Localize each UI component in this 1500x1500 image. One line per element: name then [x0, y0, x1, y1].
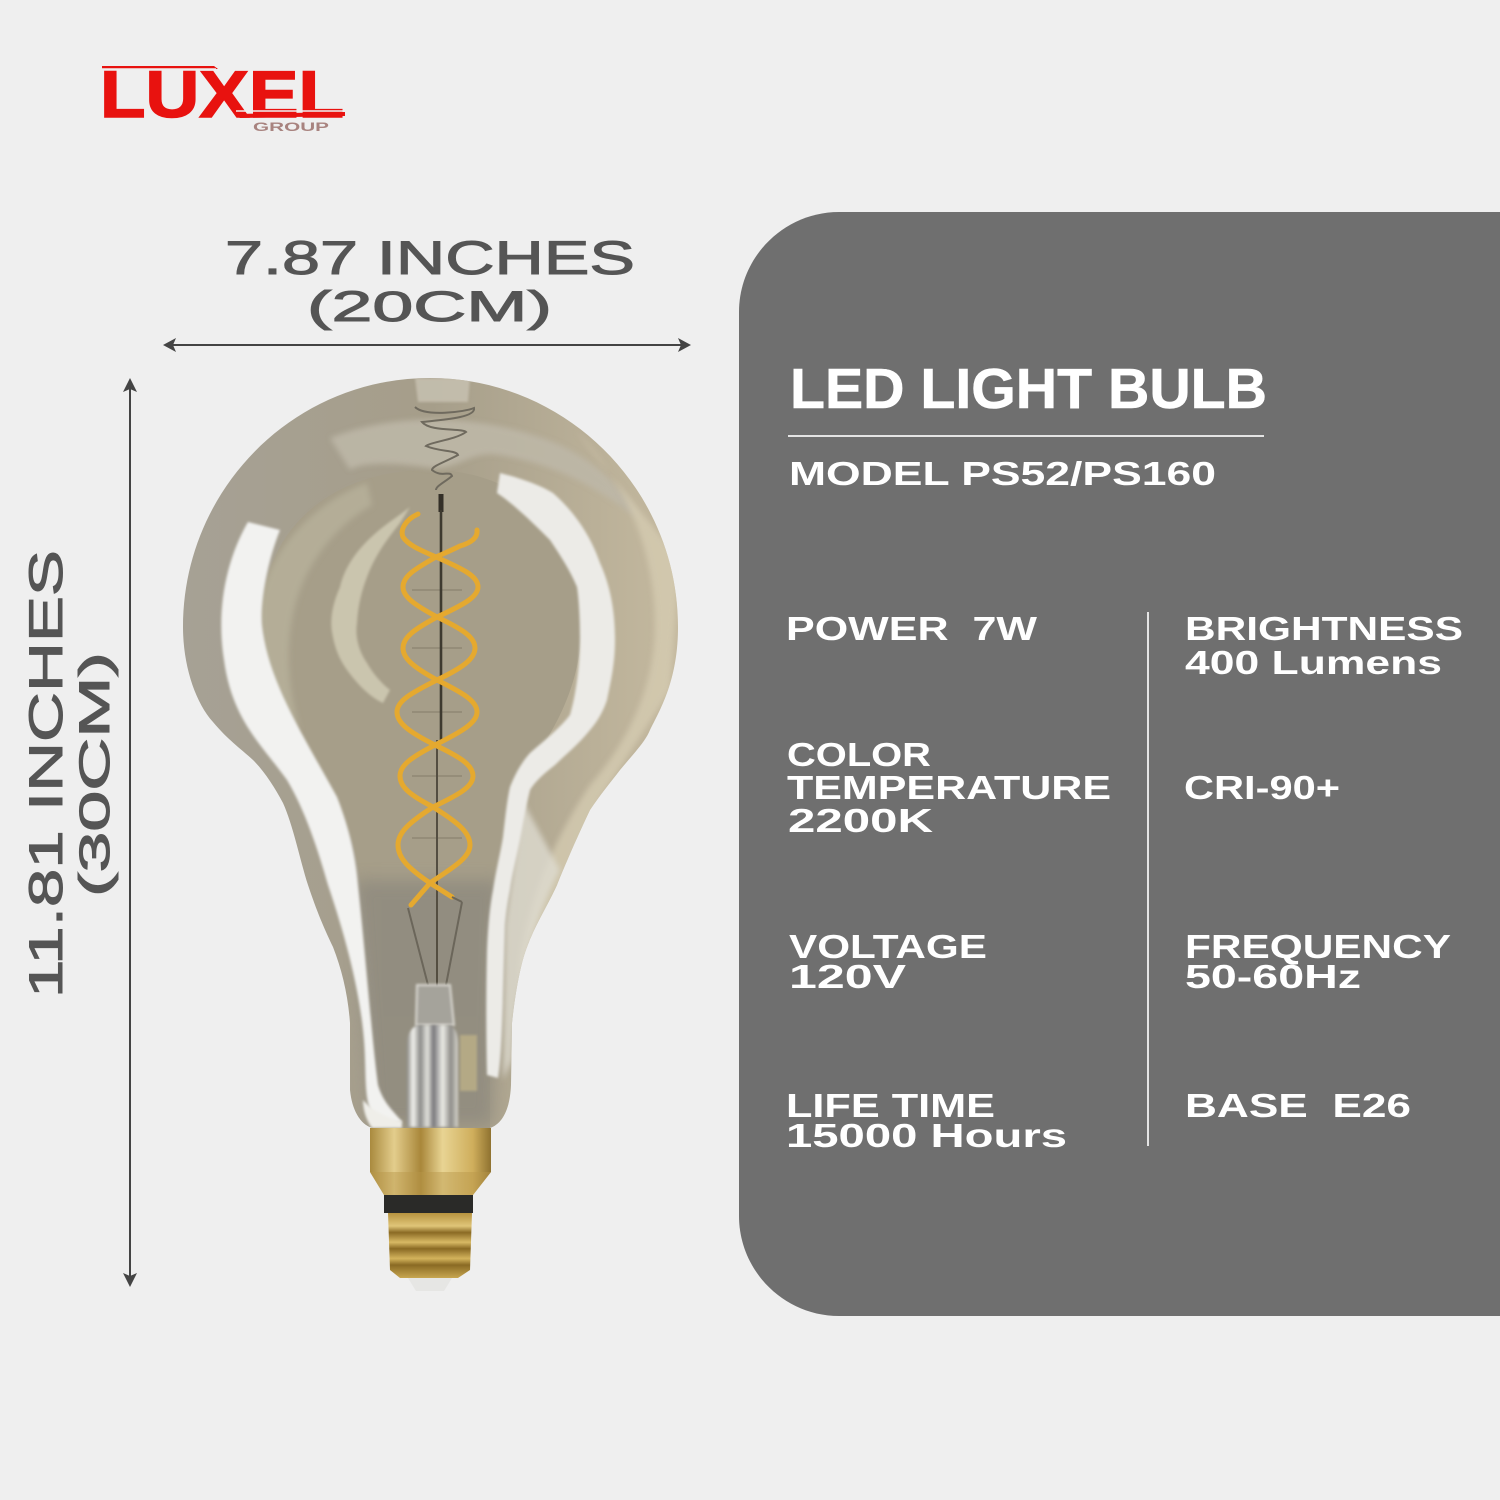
spec: brightness: BRIGHTNESS — [1185, 610, 1463, 647]
filament helix — [397, 514, 478, 905]
spec: life time: 15000 Hours — [786, 1117, 1067, 1154]
screw base — [388, 1213, 472, 1278]
spec: color temperature: 2200K — [788, 802, 933, 839]
stamped marking — [460, 1035, 477, 1091]
width dimension label: 7.87 INCHES — [225, 231, 635, 284]
light bulb — [183, 378, 680, 1291]
spec: frequency: FREQUENCY — [1185, 928, 1451, 965]
spec: power: POWER 7W — [786, 610, 1038, 647]
spec: frequency — [1185, 928, 1451, 995]
height dimension label: 11.81 INCHES — [19, 550, 72, 998]
black ring — [384, 1195, 473, 1213]
glass stem pinch — [416, 985, 454, 1025]
spec: frequency: 50-60Hz — [1185, 958, 1361, 995]
panel: specifications — [739, 212, 1500, 1316]
back filament ghost lines — [412, 590, 462, 838]
arrow: height — [123, 378, 137, 1287]
spec: life time: LIFE TIME — [786, 1087, 995, 1124]
top spiral wire — [415, 407, 474, 490]
spec: voltage: 120V — [789, 958, 906, 995]
spec: color temperature — [787, 736, 1111, 839]
logo: Luxel Group: GROUP — [253, 120, 329, 134]
glass envelope — [183, 378, 678, 1128]
width dimension label — [225, 231, 635, 331]
top glass notch — [415, 378, 470, 402]
spec: voltage: VOLTAGE — [789, 928, 987, 965]
spec: CRI: CRI-90+ — [1184, 769, 1340, 806]
highlight: left window — [221, 522, 402, 1124]
heading rule — [788, 435, 1264, 437]
inner circle reflection — [331, 507, 410, 703]
spec: voltage — [789, 928, 987, 995]
centre support wire — [438, 494, 444, 512]
height dimension label — [19, 550, 119, 998]
spec: base: BASE E26 — [1185, 1087, 1411, 1124]
brass collar — [370, 1128, 491, 1195]
base tip — [408, 1278, 452, 1291]
top light band — [332, 418, 627, 507]
glass interior shading — [260, 378, 680, 1128]
arrow: width — [163, 338, 691, 352]
spec: color temperature: COLOR — [787, 736, 931, 773]
right rim glow — [528, 492, 676, 942]
logo: Luxel Group: LUXEL — [100, 57, 344, 131]
lower neck smoke tone — [355, 880, 500, 1125]
bottom glass highlight — [363, 1100, 402, 1128]
heading: LED LIGHT BULB — [790, 357, 1267, 421]
highlight: right window — [486, 473, 615, 1078]
glass stem tube — [407, 1025, 458, 1127]
column divider — [1147, 612, 1149, 1146]
filament supports — [408, 897, 462, 985]
spec: brightness — [1185, 610, 1463, 681]
spec: brightness: 400 Lumens — [1185, 644, 1442, 681]
spec: color temperature: TEMPERATURE — [787, 769, 1111, 806]
light arc — [260, 483, 372, 730]
lower right pale glass — [503, 800, 560, 1080]
spec: life time — [786, 1087, 1067, 1154]
inner tone — [496, 496, 580, 858]
height dimension label: (30CM) — [71, 652, 119, 897]
model: MODEL PS52/PS160 — [789, 455, 1216, 492]
width dimension label: (20CM) — [307, 283, 552, 331]
